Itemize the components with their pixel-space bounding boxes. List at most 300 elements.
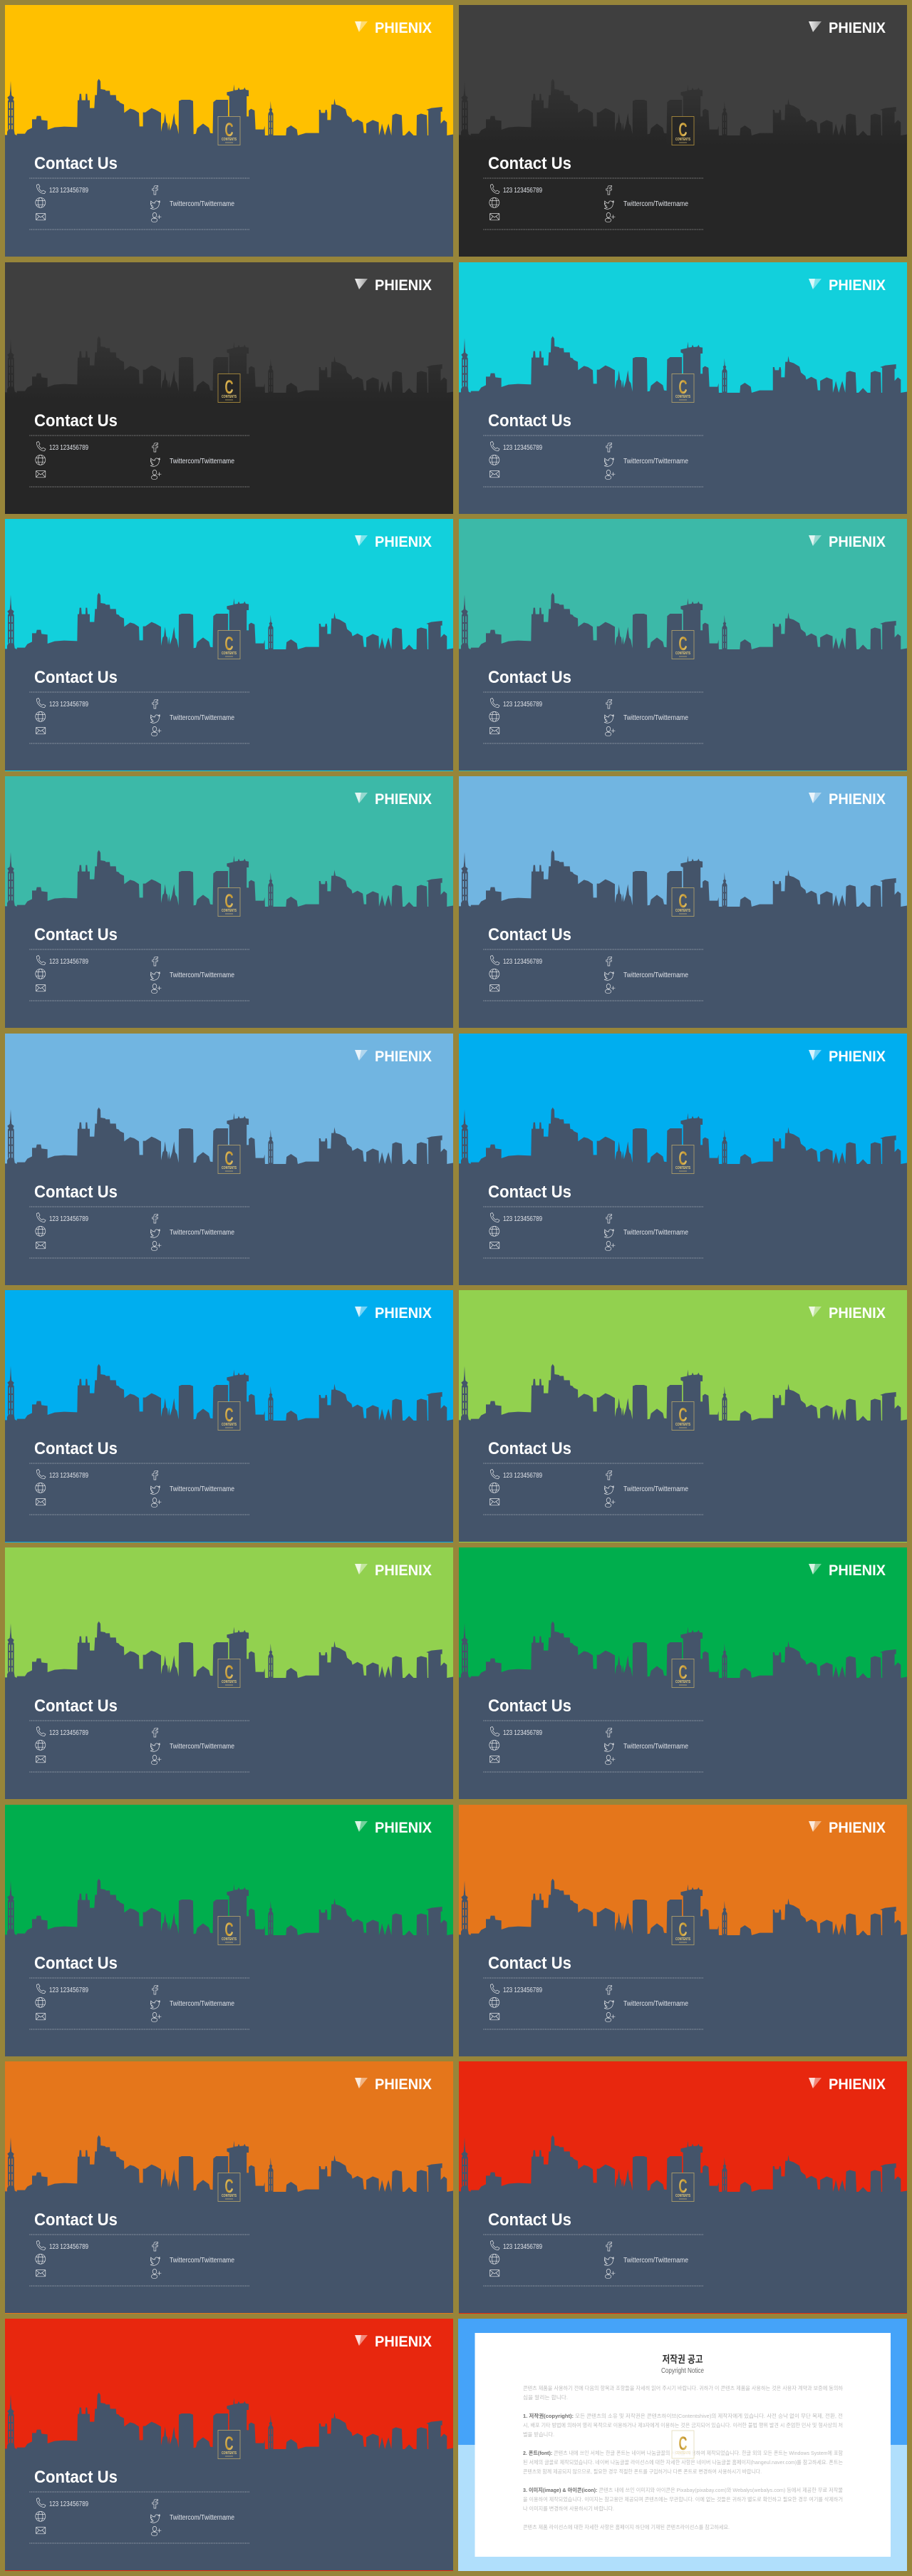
- icon: mail: [489, 1242, 499, 1249]
- contact block: [30, 668, 250, 743]
- badge: contents C: CONTENTS: [222, 1423, 237, 1427]
- badge: contents C: [672, 2173, 694, 2201]
- badge: contents C: C: [678, 633, 687, 654]
- icon: google plus: [605, 1241, 615, 1251]
- badge: contents C: [672, 1401, 694, 1430]
- bottom rule: [30, 229, 250, 230]
- skyline silhouette: [5, 336, 455, 514]
- notice title: 저작권 공고: [663, 2354, 703, 2365]
- badge: contents C: CONTENTS: [222, 138, 237, 142]
- badge: contents C: [672, 888, 694, 917]
- top rule: [30, 177, 250, 179]
- icon: mail: [489, 470, 499, 478]
- top rule: [30, 1206, 250, 1207]
- phone number: 123 123456789: [503, 187, 542, 195]
- badge: contents C: [218, 1916, 240, 1944]
- brand logo: PHIENIX: [829, 534, 886, 550]
- panel background: [5, 1034, 453, 1285]
- icon: globe: [489, 1997, 499, 2007]
- icon: globe: [36, 2254, 46, 2264]
- notice body text: 콘텐츠와 함께 제공되지 않으므로, 필요한 경우 적절한 폰트를 구입하거나 다른 폰트로 변경하여 사용하시기 바랍니다.: [523, 2468, 762, 2475]
- phone number: 123 123456789: [49, 1215, 88, 1223]
- phone number: 123 123456789: [503, 444, 542, 452]
- badge: contents C: C: [225, 119, 234, 140]
- heading: Contact Us: [34, 1696, 118, 1716]
- panel: red contact slide 2: [5, 2319, 455, 2571]
- panel background: [459, 262, 907, 514]
- notice body text: 나 이미지를 변경하여 사용하시기 바랍니다.: [523, 2505, 614, 2512]
- icon: phone: [490, 955, 499, 965]
- skyline silhouette: [5, 2393, 455, 2570]
- contact block: [483, 1439, 704, 1515]
- icon: google plus: [151, 1498, 161, 1508]
- skyline silhouette: [5, 1622, 455, 1799]
- top rule: [30, 2491, 250, 2493]
- panel: light green contact slide 1: [459, 1290, 908, 1542]
- phone number: 123 123456789: [49, 958, 88, 966]
- skyline silhouette: [459, 336, 908, 514]
- icon: google plus: [605, 212, 615, 222]
- badge: contents C: [672, 2431, 694, 2458]
- panel background: [459, 2061, 907, 2314]
- icon: google plus: [605, 1498, 615, 1508]
- panel: light blue contact slide 2: [5, 1034, 455, 1285]
- badge: contents C: CONTENTS: [675, 1937, 691, 1942]
- twitter handle: Twittercom/Twittername: [170, 200, 234, 208]
- badge: contents C: CONTENTS: [222, 1937, 237, 1942]
- brand logo: PHIENIX: [375, 2076, 432, 2093]
- icon: google plus: [151, 1755, 161, 1765]
- icon: mail: [36, 1756, 46, 1763]
- badge: contents C: C: [678, 2175, 687, 2197]
- skyline silhouette: [459, 850, 908, 1028]
- badge: contents C: [218, 1659, 240, 1688]
- heading: Contact Us: [488, 925, 571, 944]
- brand logo: PHIENIX: [829, 1820, 886, 1836]
- badge: contents C: C: [225, 2433, 234, 2454]
- panel: dark contact slide 2: [5, 262, 455, 514]
- bottom rule: [483, 743, 704, 744]
- badge: contents C: [672, 117, 694, 145]
- top rule: [483, 435, 704, 436]
- icon: twitter: [604, 715, 614, 723]
- top rule: [483, 691, 704, 693]
- phone number: 123 123456789: [49, 1472, 88, 1480]
- icon: globe: [36, 711, 46, 721]
- badge: contents C: C: [678, 890, 687, 912]
- twitter handle: Twittercom/Twittername: [623, 2257, 688, 2265]
- icon: facebook: [152, 2499, 158, 2508]
- notice subtitle: Copyright Notice: [661, 2367, 704, 2375]
- badge: contents C: CONTENTS: [222, 651, 237, 656]
- icon: facebook: [152, 185, 158, 195]
- icon: facebook: [152, 699, 158, 709]
- icon: google plus: [605, 2012, 615, 2022]
- bottom rule: [30, 1000, 250, 1001]
- panel: blue contact slide 2: [5, 1290, 455, 1542]
- bottom rule: [30, 2542, 250, 2544]
- badge: contents C: CONTENTS: [675, 395, 691, 399]
- badge: contents C: C: [678, 2433, 687, 2454]
- icon: globe: [489, 969, 499, 979]
- brand logo: PHIENIX: [375, 534, 432, 550]
- panel background: [5, 776, 453, 1028]
- panel: yellow contact slide: [5, 5, 455, 257]
- icon: google plus: [605, 726, 615, 736]
- badge: contents C: CONTENTS: [675, 909, 691, 913]
- icon: globe: [36, 197, 46, 207]
- badge: contents C: CONTENTS: [675, 1680, 691, 1684]
- badge: contents C: CONTENTS: [222, 1166, 237, 1170]
- brand logo: PHIENIX: [829, 1049, 886, 1065]
- icon: mail: [489, 2013, 499, 2020]
- panel: orange contact slide 1: [459, 1805, 908, 2056]
- icon: facebook: [152, 957, 158, 966]
- icon: google plus: [151, 1241, 161, 1251]
- brand logo: PHIENIX: [829, 277, 886, 294]
- panel background: [459, 1290, 907, 1542]
- icon: facebook: [606, 1985, 611, 1994]
- contact block: [30, 1439, 250, 1515]
- skyline silhouette: [5, 2135, 455, 2313]
- twitter handle: Twittercom/Twittername: [623, 1485, 688, 1493]
- phone number: 123 123456789: [49, 444, 88, 452]
- icon: globe: [36, 1997, 46, 2007]
- icon: mail: [36, 2270, 46, 2277]
- icon: globe: [489, 2254, 499, 2264]
- icon: twitter: [604, 1486, 614, 1494]
- icon: mail: [36, 2013, 46, 2020]
- notice body text: 1. 저작권(copyright): 모든 콘텐츠의 소유 및 저작권은 콘텐츠하이브(Contentshive)의 제작자에게 있습니다. 사전 승낙 없이 무단 복제, 전환, 전: [523, 2412, 843, 2419]
- brand logo: PHIENIX: [829, 1562, 886, 1579]
- icon: facebook: [606, 1728, 611, 1737]
- icon: twitter: [150, 972, 160, 980]
- contact block: [30, 411, 250, 487]
- icon: facebook: [606, 2242, 611, 2251]
- icon: google plus: [605, 470, 615, 480]
- icon: globe: [36, 1740, 46, 1750]
- contact block: [483, 925, 704, 1001]
- twitter handle: Twittercom/Twittername: [170, 972, 234, 979]
- heading: Contact Us: [34, 668, 118, 687]
- twitter handle: Twittercom/Twittername: [623, 972, 688, 979]
- contact block: [30, 1183, 250, 1258]
- icon: facebook: [152, 2242, 158, 2251]
- notice body text: 벌을 받습니다.: [523, 2431, 554, 2438]
- top rule: [483, 949, 704, 950]
- icon: twitter: [150, 2515, 160, 2523]
- bottom rule: [30, 2285, 250, 2287]
- skyline silhouette: [459, 79, 908, 257]
- icon: globe: [489, 1740, 499, 1750]
- badge: contents C: [218, 373, 240, 402]
- icon: phone: [36, 699, 46, 708]
- heading: Contact Us: [488, 668, 571, 687]
- brand logo: PHIENIX: [829, 1305, 886, 1322]
- icon: mail: [489, 2270, 499, 2277]
- icon: google plus: [151, 470, 161, 480]
- brand logo: PHIENIX: [375, 1049, 432, 1065]
- notice background lower: [458, 2445, 907, 2571]
- icon: facebook: [152, 1470, 158, 1480]
- badge: contents C: C: [225, 1404, 234, 1426]
- heading: Contact Us: [488, 2210, 571, 2230]
- icon: mail: [36, 213, 46, 220]
- skyline silhouette: [5, 1364, 455, 1542]
- notice body text: [523, 2384, 843, 2530]
- icon: globe: [36, 1483, 46, 1493]
- skyline silhouette: [5, 850, 455, 1028]
- twitter handle: Twittercom/Twittername: [170, 1229, 234, 1237]
- badge: contents C: [218, 1401, 240, 1430]
- top rule: [483, 2234, 704, 2235]
- brand logo: PHIENIX: [375, 277, 432, 294]
- badge: contents C: [672, 1916, 694, 1944]
- heading: Contact Us: [34, 925, 118, 944]
- icon: google plus: [151, 2012, 161, 2022]
- skyline silhouette: [459, 1364, 908, 1542]
- brand logo: PHIENIX: [829, 791, 886, 808]
- heading: Contact Us: [488, 1954, 571, 1973]
- badge: contents C: [672, 373, 694, 402]
- icon: phone: [36, 2241, 46, 2250]
- contact block: [30, 2210, 250, 2286]
- icon: facebook: [606, 699, 611, 709]
- panel: light green contact slide 2: [5, 1547, 455, 1799]
- icon: phone: [490, 1213, 499, 1222]
- panel: dark contact slide 1: [459, 5, 908, 257]
- heading: Contact Us: [34, 154, 118, 173]
- notice background upper: [458, 2319, 907, 2445]
- badge: contents C: CONTENTS: [675, 2194, 691, 2198]
- icon: facebook: [152, 1214, 158, 1223]
- badge: contents C: CONTENTS: [675, 2451, 691, 2456]
- twitter handle: Twittercom/Twittername: [623, 1229, 688, 1237]
- heading: Contact Us: [34, 411, 118, 431]
- badge: contents C: C: [225, 633, 234, 654]
- badge: contents C: CONTENTS: [222, 1680, 237, 1684]
- icon: twitter: [150, 2257, 160, 2265]
- icon: phone: [36, 1726, 46, 1736]
- icon: twitter: [604, 2257, 614, 2265]
- icon: phone: [490, 1984, 499, 1994]
- twitter handle: Twittercom/Twittername: [170, 2514, 234, 2522]
- icon: google plus: [605, 1755, 615, 1765]
- badge: contents C: CONTENTS: [675, 1423, 691, 1427]
- icon: twitter: [604, 458, 614, 466]
- top rule: [483, 1206, 704, 1207]
- top rule: [30, 949, 250, 950]
- phone number: 123 123456789: [49, 2500, 88, 2508]
- icon: google plus: [151, 2526, 161, 2536]
- skyline silhouette: [5, 593, 455, 771]
- badge: contents C: C: [225, 890, 234, 912]
- icon: globe: [36, 455, 46, 465]
- twitter handle: Twittercom/Twittername: [170, 714, 234, 722]
- top rule: [483, 1463, 704, 1464]
- skyline silhouette: [459, 593, 908, 771]
- heading: Contact Us: [34, 1954, 118, 1973]
- skyline silhouette: [459, 1879, 908, 2056]
- bottom rule: [30, 1257, 250, 1259]
- brand logo: PHIENIX: [375, 1562, 432, 1579]
- panel: orange contact slide 2: [5, 2061, 455, 2314]
- bottom rule: [483, 2285, 704, 2287]
- badge: contents C: C: [225, 1919, 234, 1940]
- icon: google plus: [605, 2269, 615, 2279]
- icon: phone: [490, 184, 499, 194]
- notice card: [475, 2333, 891, 2557]
- bottom rule: [30, 1514, 250, 1515]
- phone number: 123 123456789: [49, 1987, 88, 1994]
- badge: contents C: CONTENTS: [222, 2451, 237, 2456]
- icon: facebook: [152, 443, 158, 452]
- badge: contents C: CONTENTS: [675, 651, 691, 656]
- phone number: 123 123456789: [503, 958, 542, 966]
- brand logo: PHIENIX: [375, 20, 432, 36]
- twitter handle: Twittercom/Twittername: [623, 714, 688, 722]
- badge: contents C: [218, 117, 240, 145]
- badge: contents C: [218, 630, 240, 659]
- icon: twitter: [604, 2001, 614, 2009]
- icon: phone: [36, 1213, 46, 1222]
- top rule: [30, 435, 250, 436]
- icon: globe: [36, 1226, 46, 1236]
- top rule: [483, 177, 704, 179]
- contact block: [30, 925, 250, 1001]
- icon: globe: [489, 197, 499, 207]
- icon: mail: [36, 470, 46, 478]
- panel background: [5, 1547, 453, 1799]
- contact block: [483, 1954, 704, 2029]
- phone number: 123 123456789: [503, 2243, 542, 2251]
- bottom rule: [483, 1771, 704, 1773]
- heading: Contact Us: [34, 2468, 118, 2487]
- contact block: [483, 2210, 704, 2286]
- badge: contents C: C: [225, 2175, 234, 2197]
- notice body text: 심을 알리는 합니다.: [523, 2394, 568, 2401]
- icon: phone: [36, 1470, 46, 1479]
- bottom rule: [483, 1514, 704, 1515]
- phone number: 123 123456789: [503, 1472, 542, 1480]
- icon: twitter: [150, 1486, 160, 1494]
- twitter handle: Twittercom/Twittername: [623, 200, 688, 208]
- icon: twitter: [150, 715, 160, 723]
- panel: cyan contact slide 1: [459, 262, 908, 514]
- skyline silhouette: [5, 1108, 455, 1285]
- panel: teal contact slide 2: [5, 776, 455, 1028]
- top rule: [30, 1977, 250, 1979]
- icon: mail: [36, 1242, 46, 1249]
- icon: google plus: [605, 984, 615, 994]
- skyline silhouette: [459, 2135, 908, 2313]
- panel background: [5, 2061, 453, 2314]
- icon: phone: [490, 1726, 499, 1736]
- twitter handle: Twittercom/Twittername: [623, 458, 688, 465]
- top rule: [483, 1720, 704, 1721]
- icon: globe: [489, 711, 499, 721]
- contact block: [483, 668, 704, 743]
- brand logo: PHIENIX: [375, 2334, 432, 2350]
- twitter handle: Twittercom/Twittername: [170, 1485, 234, 1493]
- notice body text: 3. 이미지(image) & 아이콘(icon): 콘텐츠 내에 쓰인 이미지와 아이콘은 Pixabay(pixabay.com)와 Webalys(webalys.com) 등에서 제공한 무료 저작물: [523, 2486, 843, 2493]
- bottom rule: [483, 1257, 704, 1259]
- badge: contents C: C: [225, 1661, 234, 1683]
- bottom rule: [30, 743, 250, 744]
- icon: phone: [36, 442, 46, 451]
- icon: phone: [36, 1984, 46, 1994]
- panel: light blue contact slide 1: [459, 776, 908, 1028]
- heading: Contact Us: [488, 1696, 571, 1716]
- panel background: [5, 262, 453, 514]
- icon: google plus: [151, 984, 161, 994]
- panel background: [459, 776, 907, 1028]
- heading: Contact Us: [488, 1439, 571, 1458]
- contact block: [483, 411, 704, 487]
- badge: contents C: [218, 1145, 240, 1173]
- badge: contents C: CONTENTS: [222, 2194, 237, 2198]
- icon: facebook: [152, 1728, 158, 1737]
- bottom rule: [483, 1000, 704, 1001]
- panel background: [459, 1034, 907, 1285]
- badge: contents C: CONTENTS: [675, 138, 691, 142]
- skyline silhouette: [5, 1879, 455, 2056]
- top rule: [30, 1463, 250, 1464]
- badge: contents C: [672, 1145, 694, 1173]
- phone number: 123 123456789: [503, 1987, 542, 1994]
- contact block: [30, 2468, 250, 2543]
- brand logo: PHIENIX: [375, 1820, 432, 1836]
- phone number: 123 123456789: [503, 1729, 542, 1737]
- badge: contents C: [218, 2173, 240, 2201]
- bottom rule: [483, 486, 704, 488]
- bottom rule: [483, 2029, 704, 2030]
- twitter handle: Twittercom/Twittername: [623, 2000, 688, 2008]
- icon: facebook: [606, 957, 611, 966]
- panel: green contact slide 1: [459, 1547, 908, 1799]
- icon: mail: [489, 1756, 499, 1763]
- icon: twitter: [604, 1230, 614, 1237]
- twitter handle: Twittercom/Twittername: [170, 2000, 234, 2008]
- skyline silhouette: [459, 1622, 908, 1799]
- icon: mail: [36, 984, 46, 991]
- phone number: 123 123456789: [503, 1215, 542, 1223]
- panel: green contact slide 2: [5, 1805, 455, 2056]
- bottom rule: [30, 1771, 250, 1773]
- icon: mail: [36, 727, 46, 734]
- icon: google plus: [151, 212, 161, 222]
- icon: mail: [36, 2527, 46, 2534]
- icon: twitter: [150, 1743, 160, 1751]
- skyline silhouette: [5, 79, 455, 257]
- icon: phone: [490, 442, 499, 451]
- phone number: 123 123456789: [49, 2243, 88, 2251]
- panel background: [5, 5, 453, 257]
- icon: facebook: [606, 1470, 611, 1480]
- icon: twitter: [150, 2001, 160, 2009]
- icon: mail: [36, 1498, 46, 1505]
- icon: twitter: [604, 972, 614, 980]
- contact block: [30, 1954, 250, 2029]
- twitter handle: Twittercom/Twittername: [170, 458, 234, 465]
- icon: google plus: [151, 2269, 161, 2279]
- icon: twitter: [150, 201, 160, 209]
- twitter handle: Twittercom/Twittername: [623, 1743, 688, 1751]
- twitter handle: Twittercom/Twittername: [170, 2257, 234, 2265]
- icon: twitter: [150, 458, 160, 466]
- icon: facebook: [152, 1985, 158, 1994]
- contact block: [483, 1183, 704, 1258]
